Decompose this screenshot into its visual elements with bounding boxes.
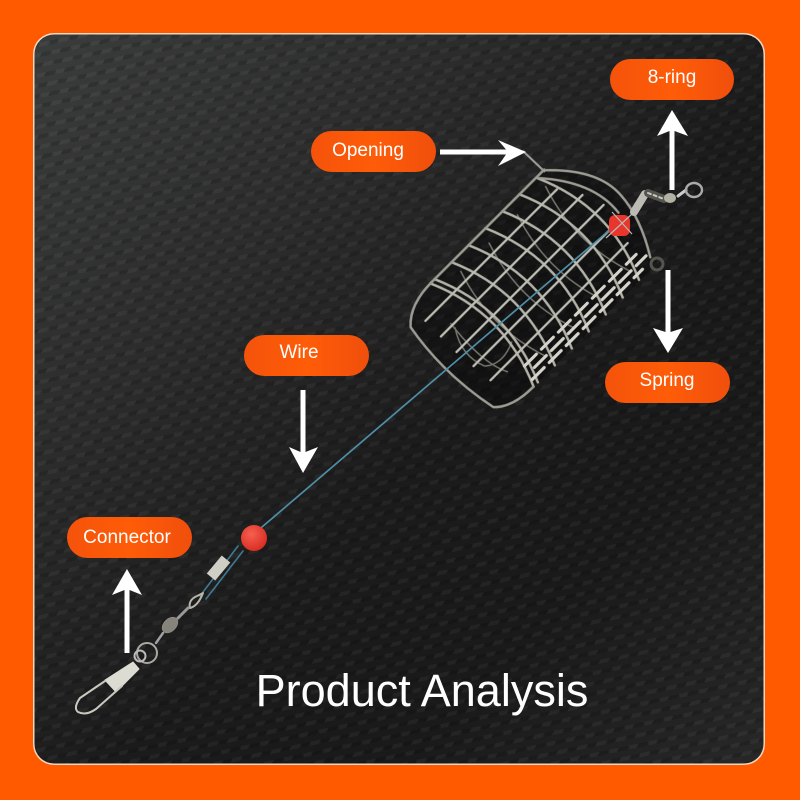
product: feeder cage: [395, 144, 673, 422]
connector swivel and snap: [76, 593, 203, 713]
label: 8-ring: 8-ring: [648, 67, 696, 88]
bright doubled ribs on the spring side: [522, 250, 651, 380]
arrow: Spring: [653, 270, 683, 353]
label: Spring: Spring: [640, 370, 694, 391]
arrow: 8-ring: [657, 110, 688, 190]
arrow: Wire: [289, 390, 318, 473]
crimp sleeve: [211, 559, 226, 577]
back wires: [423, 187, 630, 394]
spring loop on cage: [651, 258, 663, 270]
label: Wire: [244, 335, 369, 376]
red bead inside cage: [606, 212, 632, 238]
label: Wire: Wire: [279, 342, 319, 363]
long ribs: [425, 174, 635, 383]
label: Connector: Connector: [83, 527, 171, 548]
label: Opening: Opening: [332, 140, 404, 161]
label: Opening: [311, 131, 436, 172]
arrow: Connector: [112, 569, 142, 653]
top swivel: 8-ring: [634, 183, 702, 212]
outer rim and rounded ends: [395, 144, 673, 422]
label: Connector: [67, 517, 192, 558]
title: Product Analysis: [256, 665, 588, 716]
hoop wires: [430, 166, 651, 387]
label: 8-ring: [610, 59, 734, 100]
opening tab wire: [523, 151, 545, 172]
label: Spring: [605, 362, 730, 403]
wire line: [200, 228, 612, 599]
arrow: Opening: [440, 140, 526, 166]
cage shadow interior: [395, 144, 673, 422]
red bead on wire: [241, 525, 267, 551]
